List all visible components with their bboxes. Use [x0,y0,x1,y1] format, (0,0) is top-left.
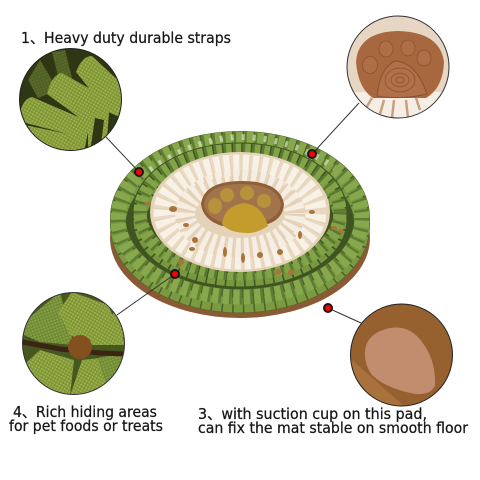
mat brown base [110,158,370,318]
caption: feature 4: for pet foods or treats [9,417,163,435]
caption: feature 3 [198,405,469,437]
paw pad centre [201,181,284,233]
callout line: suction cup [328,308,361,323]
cream fabric tufts [150,152,330,272]
caption: feature 3: 3、with suction cup on this pad, [198,405,427,423]
callout line: paw pad [312,103,359,154]
middle green ring [140,150,340,280]
marker dot: hiding areas [171,270,179,278]
caption: feature 4 [9,403,163,435]
detail circle: suction cup [350,303,453,407]
callout line: hiding areas [117,274,175,315]
detail circle: hiding areas [22,292,126,396]
treat crumbs [145,202,344,275]
marker dot: suction cup [324,304,332,312]
top loops of outer ring [150,137,335,170]
marker dot: straps [135,168,143,176]
caption: feature 4: 4、Rich hiding areas [13,403,157,421]
snuffle mat [110,137,370,318]
callout line: straps [106,137,139,172]
heading: feature 1: 1、Heavy duty durable straps [21,29,231,47]
marker dot: paw pad [308,150,316,158]
outer green ring [118,139,362,305]
detail circle: paw pad [347,16,449,118]
detail circle: straps [19,48,122,152]
caption: feature 3: can fix the mat stable on smooth floor [198,419,469,437]
